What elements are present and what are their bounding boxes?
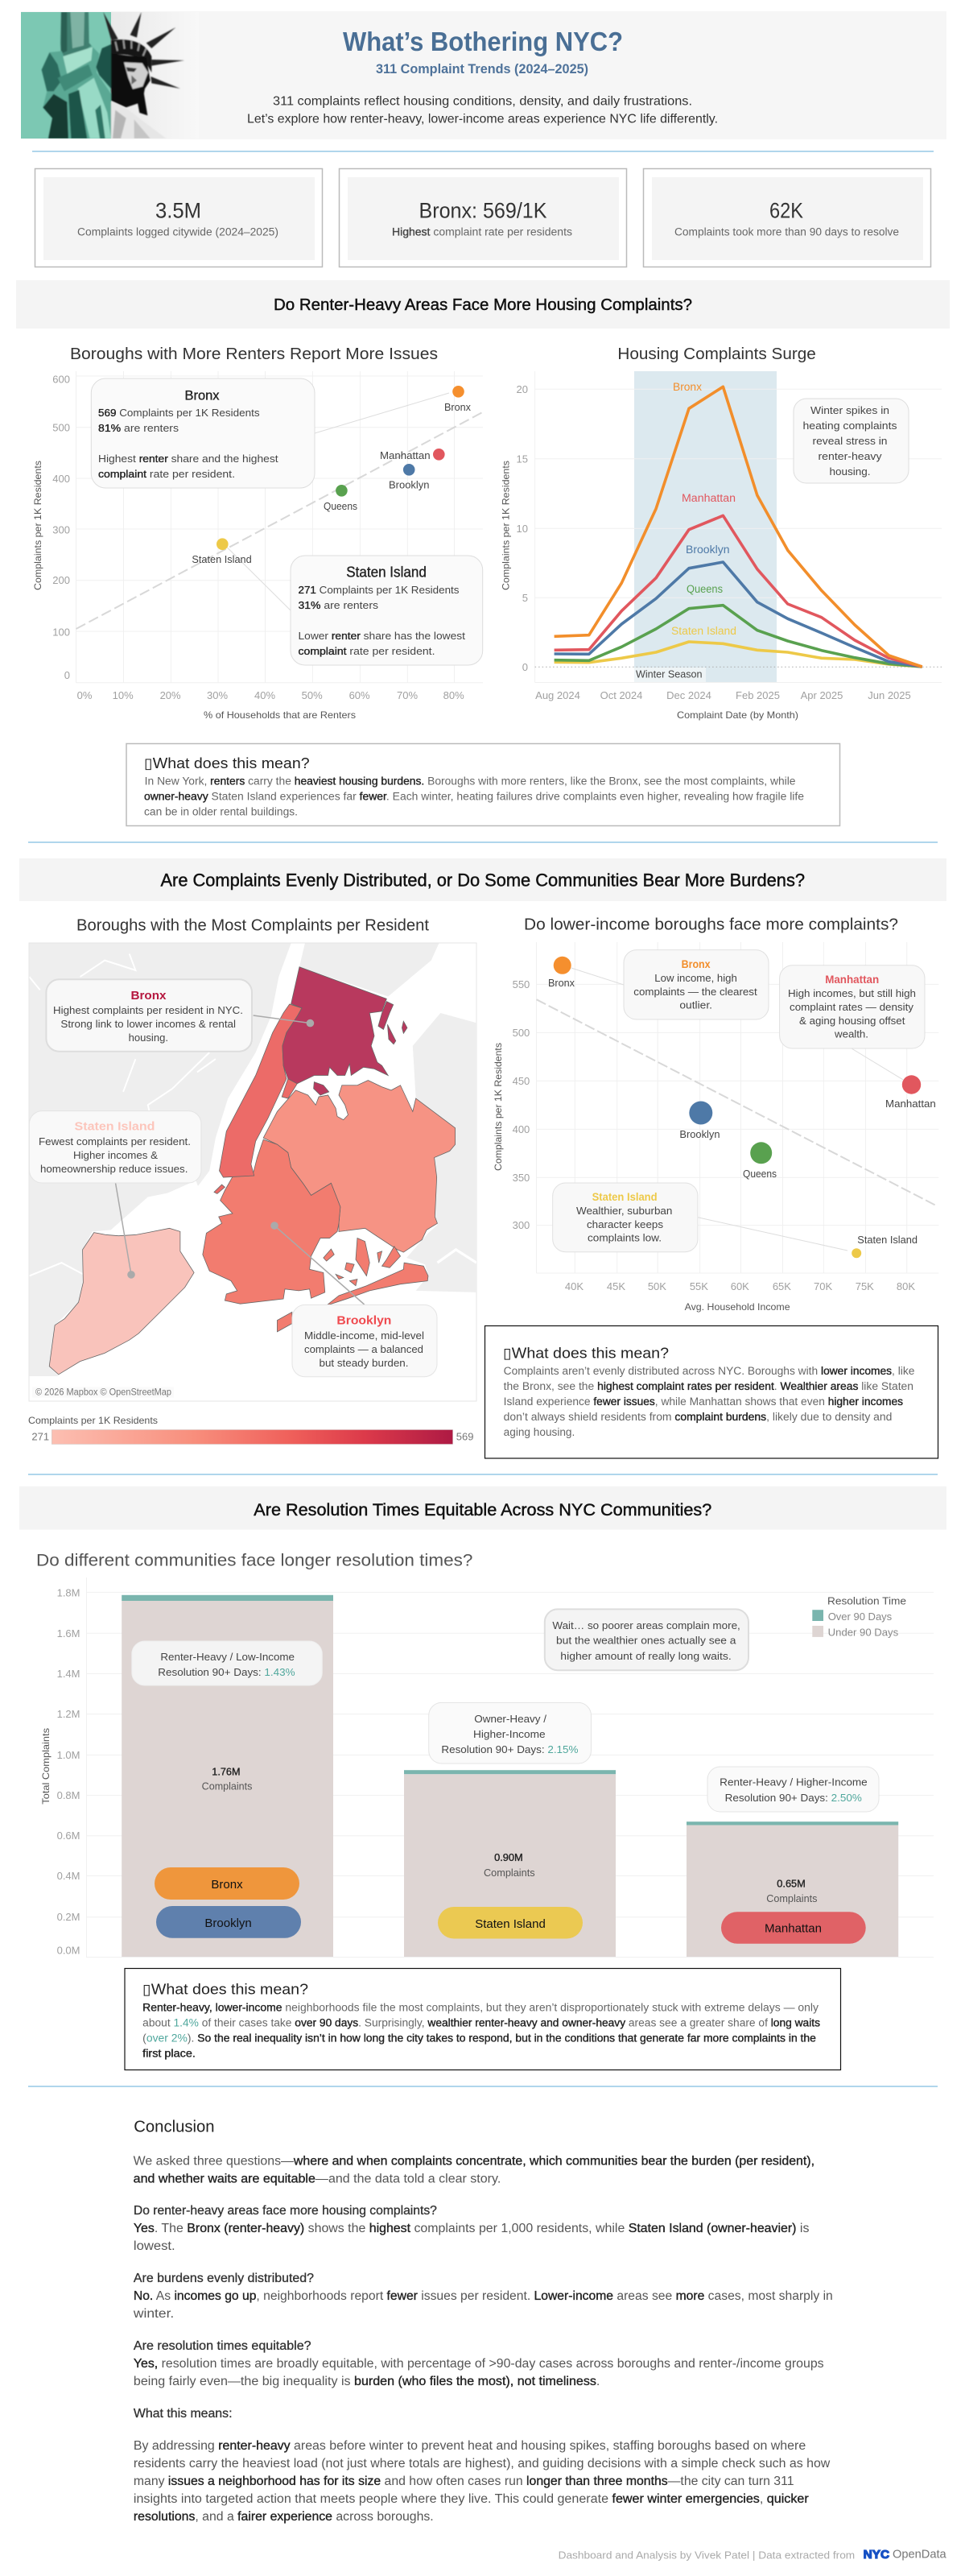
KPI card: total complaints: Complaints logged citywide (2024–2025): [77, 225, 278, 238]
subtitle: 311 Complaint Trends (2024–2025): [376, 61, 588, 76]
line chart: housing complaints by month: 20: [517, 383, 528, 395]
scatter chart: income vs complaints: Queens: [743, 1168, 777, 1180]
question two: winter.: [133, 2307, 174, 2321]
callout: winter spikes: reveal stress in: [813, 435, 887, 447]
insight box: resolution: ▯What does this mean?: [142, 1982, 308, 1998]
Manhattan borough: [219, 1004, 302, 1177]
icon: NYC OpenData logo: [864, 2548, 946, 2562]
scatter chart: income vs complaints: 550: [513, 978, 530, 990]
question two: Are burdens evenly distributed?: [134, 2272, 314, 2285]
legend: resolution time: Under 90 Days: [828, 1627, 899, 1639]
section heading: housing: Do Renter-Heavy Areas Face More Housing Complaints?: [274, 296, 692, 314]
callout: winter spikes: Winter spikes in: [810, 404, 889, 416]
icon: Statue of Liberty image: [21, 12, 199, 139]
scatter chart: renters vs complaints: 0: [64, 669, 70, 681]
question two: No. As incomes go up, neighborhoods report fewer issues per resident. Lower-income areas see more cases, most sharply in: [134, 2289, 833, 2303]
KPI card: total complaints: 3.5M: [155, 198, 201, 222]
map legend: 569: [456, 1431, 474, 1443]
scatter chart: income vs complaints: Bronx: [548, 977, 575, 989]
question one: Yes. The Bronx (renter-heavy) shows the highest complaints per 1,000 residents, while Staten Island (owner-heavier) is: [134, 2222, 810, 2235]
callout: winter spikes: housing.: [829, 465, 871, 478]
stacked bar chart: resolution times: 1.8M: [57, 1586, 80, 1599]
stacked bar chart: resolution times: 1.2M: [57, 1708, 80, 1720]
scatter chart: renters vs complaints: 60%: [349, 689, 370, 701]
insight box: renters: ▯What does this mean?: [144, 755, 310, 771]
scatter chart: renters vs complaints: Complaints per 1K Residents: [32, 461, 43, 590]
Rockaway and Jamaica Bay islands: [277, 1238, 428, 1332]
what this means: residents carry the heaviest load (not just where totals are highest), and guiding decisions with a simple check such as how: [134, 2457, 831, 2471]
legend: resolution time: Over 90 Days: [828, 1611, 893, 1623]
Bronx borough: [282, 967, 388, 1084]
scatter chart: renters vs complaints: 0%: [77, 689, 93, 701]
callout: Bronx income: [624, 950, 769, 1019]
insight box: distribution: Complaints aren’t evenly distributed across NYC. Boroughs with lower incomes, like: [504, 1365, 914, 1377]
bar: owner-heavy higher-income: Higher-Income: [473, 1728, 546, 1740]
callout: Brooklyn map: complaints — a balanced: [304, 1343, 423, 1355]
callout: Staten Island renters: complaint rate per resident.: [298, 645, 435, 657]
bar: owner-heavy higher-income: 0.90M: [494, 1852, 523, 1863]
scatter chart: renters vs complaints: 80%: [443, 689, 464, 701]
stacked bar chart: resolution times: [40, 1577, 934, 1958]
bar: renter-heavy low-income: 1.76M: [212, 1767, 240, 1778]
question three: [134, 2339, 824, 2388]
callout: Bronx income: Bronx: [682, 958, 711, 970]
scatter chart: income vs complaints: 45K: [607, 1280, 625, 1292]
bar: renter-heavy higher-income: Renter-Heavy / Higher-Income: [720, 1776, 868, 1788]
intro text: [247, 95, 718, 126]
line chart: housing complaints by month: 10: [517, 523, 528, 535]
what this means: insights into targeted action that meets people where they live. This could generate fewer winter emergencies , quicker: [134, 2492, 809, 2506]
scatter chart: renters vs complaints: Manhattan: [380, 449, 431, 461]
conclusion intro: [134, 2154, 814, 2186]
bar: owner-heavy higher-income: Staten Island: [475, 1917, 546, 1931]
KPI card: Bronx rate: Highest complaint rate per residents: [392, 225, 572, 238]
bar: renter-heavy low-income: Brooklyn: [204, 1916, 252, 1930]
insight box: resolution: (over 2%). So the real inequality isn’t in how long the city takes to respond, but in the conditions that generate far more complaints in the: [142, 2032, 816, 2045]
insight box: resolution: Renter-heavy, lower-income neighborhoods file the most complaints, but they aren’t disproportionately stuck with extreme delays — only: [142, 2002, 819, 2014]
scatter chart: renters vs complaints: 30%: [207, 689, 228, 701]
callout: Manhattan income: wealth.: [834, 1028, 868, 1040]
callout: long waits: higher amount of really long waits.: [560, 1650, 732, 1662]
scatter chart: income vs complaints: 55K: [690, 1280, 708, 1292]
bar: renter-heavy low-income: [122, 1595, 333, 1957]
callout: Bronx renters: 81% are renters: [98, 422, 179, 434]
scatter chart: income vs complaints: 75K: [856, 1280, 874, 1292]
scatter chart: income vs complaints: 60K: [731, 1280, 749, 1292]
scatter chart: renters vs complaints: 300: [52, 523, 70, 536]
callout: Bronx income: complaints — the clearest: [633, 986, 757, 998]
chart title: resolution: Do different communities face longer resolution times?: [36, 1551, 472, 1570]
line chart: housing complaints by month: Complaint Date (by Month): [677, 709, 798, 721]
callout: Bronx renters: [91, 378, 315, 488]
legend: resolution time: [812, 1594, 906, 1639]
bar: owner-heavy higher-income: Resolution 90+ Days: 2.15%: [441, 1743, 579, 1755]
bar: renter-heavy higher-income: Complaints: [766, 1893, 817, 1904]
bar: renter-heavy low-income: Complaints: [202, 1781, 252, 1792]
callout: Staten Island map: Higher incomes &: [73, 1149, 158, 1161]
legend: resolution time: Resolution Time: [827, 1594, 906, 1606]
bar: owner-heavy higher-income: Owner-Heavy /: [474, 1713, 546, 1725]
insight box: distribution: ▯What does this mean?: [503, 1345, 669, 1361]
callout: winter spikes: heating complaints: [803, 420, 897, 432]
callout: Staten Island income: Staten Island: [592, 1191, 658, 1203]
scatter chart: income vs complaints: 80K: [897, 1280, 915, 1292]
callout: Staten Island income: Wealthier, suburban: [576, 1205, 672, 1217]
section heading: distribution: Are Complaints Evenly Distributed, or Do Some Communities Bear More Burdens?: [161, 870, 805, 891]
KPI card: long waits: [644, 169, 930, 267]
callout: long waits: Wait… so poorer areas complain more,: [552, 1619, 740, 1631]
scatter chart: income vs complaints: 65K: [773, 1280, 791, 1292]
callout: long waits: but the wealthier ones actually see a: [556, 1635, 736, 1647]
footer credit: [559, 2548, 946, 2562]
map legend: Complaints per 1K Residents: [28, 1415, 158, 1426]
scatter chart: income vs complaints: 300: [513, 1219, 530, 1231]
conclusion intro: We asked three questions— where and when complaints concentrate, which communities bear the burden (per resident),: [134, 2154, 814, 2168]
line chart: housing complaints by month: Brooklyn: [686, 544, 729, 556]
scatter chart: renters vs complaints: 200: [52, 574, 70, 586]
bar: owner-heavy higher-income: Complaints: [484, 1867, 535, 1879]
icon: NYC OpenData logo: OpenData: [893, 2548, 946, 2562]
question one: [134, 2204, 810, 2253]
bar: renter-heavy higher-income: 0.65M: [777, 1879, 806, 1890]
callout: Bronx renters: Highest renter share and the highest: [98, 453, 278, 465]
callout: long waits: [545, 1609, 748, 1670]
line chart: housing complaints by month: Aug 2024: [535, 689, 580, 701]
callout: Staten Island income: [553, 1183, 698, 1252]
footer credit: Dashboard and Analysis by Vivek Patel | Data extracted from: [559, 2549, 855, 2561]
scatter chart: renters vs complaints: 20%: [160, 689, 181, 701]
map: complaints per resident by borough: [29, 943, 476, 1401]
bar: renter-heavy low-income: Resolution 90+ Days: 1.43%: [158, 1666, 295, 1678]
intro text: 311 complaints reflect housing conditions, density, and daily frustrations.: [273, 95, 692, 108]
insight box: resolution: about 1.4% of their cases take over 90 days. Surprisingly, wealthier renter-heavy and owner-heavy areas see a greater share of long waits: [142, 2017, 820, 2029]
Queens borough: [263, 1081, 456, 1252]
scatter chart: renters vs complaints: % of Households that are Renters: [204, 709, 356, 721]
scatter chart: income vs complaints: 500: [513, 1027, 530, 1039]
Staten Island borough: [49, 1228, 194, 1375]
map legend: 271: [31, 1431, 49, 1443]
conclusion heading: Conclusion: [134, 2118, 214, 2136]
scatter chart: renters vs complaints: 500: [52, 422, 70, 433]
stacked bar chart: resolution times: 1.0M: [57, 1749, 80, 1761]
chart title: renters scatter: Boroughs with More Renters Report More Issues: [70, 345, 438, 363]
insight box: renters: owner-heavy Staten Island experiences far fewer. Each winter, heating failures drive complaints even higher, revealing how fragile life: [144, 791, 804, 803]
callout: Brooklyn map: Brooklyn: [336, 1314, 391, 1327]
scatter chart: renters vs complaints: 70%: [397, 689, 418, 701]
callout: Bronx income: Low income, high: [654, 972, 737, 984]
title: What’s Bothering NYC?: [343, 27, 623, 56]
callout: Bronx income: outlier.: [679, 999, 712, 1011]
callout: Manhattan income: complaint rates — density: [790, 1001, 913, 1013]
callout: Bronx renters: complaint rate per resident.: [98, 468, 235, 480]
stacked bar chart: resolution times: Total Complaints: [40, 1728, 52, 1805]
KPI card: Bronx rate: [340, 169, 626, 267]
question three: being fairly even—the big inequality is burden (who files the most), not timeliness .: [134, 2375, 600, 2388]
insight box: distribution: [485, 1325, 938, 1458]
scatter chart: income vs complaints: 50K: [648, 1280, 666, 1292]
bar: renter-heavy higher-income: Resolution 90+ Days: 2.50%: [725, 1792, 862, 1804]
callout: Bronx renters: Bronx: [185, 388, 220, 403]
stacked bar chart: resolution times: 0.2M: [57, 1911, 80, 1923]
insight box: renters: [126, 744, 840, 826]
scatter chart: renters vs complaints: 400: [52, 473, 70, 485]
what this means: What this means:: [134, 2407, 232, 2421]
line chart: housing complaints by month: 0: [522, 661, 528, 673]
stacked bar chart: resolution times: 1.6M: [57, 1627, 80, 1639]
scatter chart: income vs complaints: 70K: [814, 1280, 832, 1292]
callout: winter spikes: [794, 399, 909, 483]
callout: Staten Island renters: Staten Island: [346, 564, 427, 581]
callout: Staten Island map: Fewest complaints per resident.: [39, 1135, 191, 1147]
question three: Yes, resolution times are broadly equitable, with percentage of >90-day cases across boroughs and renter-/income groups: [134, 2357, 824, 2371]
section heading: housing: [16, 280, 950, 329]
section heading: distribution: [19, 858, 946, 901]
line chart: housing complaints by month: Oct 2024: [600, 689, 642, 701]
insight box: distribution: the Bronx, see the highest complaint rates per resident . Wealthier areas like Staten: [504, 1380, 913, 1392]
what this means: By addressing renter-heavy areas before winter to prevent heat and housing spikes, staffing boroughs based on where: [134, 2439, 806, 2453]
icon: NYC OpenData logo: NYC: [864, 2548, 889, 2562]
callout: Staten Island map: [29, 1111, 201, 1183]
scatter chart: income vs complaints: 350: [513, 1172, 530, 1184]
scatter chart: renters vs complaints: 40%: [254, 689, 275, 701]
scatter chart: income vs complaints: [493, 942, 938, 1313]
callout: Bronx map: Strong link to lower incomes & rental: [60, 1018, 236, 1030]
line chart: housing complaints by month: Jun 2025: [868, 689, 911, 701]
scatter chart: renters vs complaints: 10%: [113, 689, 134, 701]
what this means: many issues a neighborhood has for its size and how often cases run longer than three months—the city can turn 311: [134, 2475, 794, 2488]
scatter chart: income vs complaints: Brooklyn: [679, 1128, 720, 1140]
intro text: Let’s explore how renter-heavy, lower-income areas experience NYC life differently.: [247, 113, 718, 126]
callout: Staten Island map: Staten Island: [74, 1120, 155, 1134]
callout: Staten Island renters: [291, 556, 483, 665]
scatter chart: renters vs complaints: 50%: [302, 689, 323, 701]
what this means: resolutions, and a fairer experience across boroughs.: [134, 2510, 434, 2524]
callout: Staten Island renters: 271 Complaints per 1K Residents: [298, 584, 460, 596]
insight box: distribution: don’t always shield residents from complaint burdens , likely due to density and: [504, 1411, 892, 1423]
section heading: resolution: Are Resolution Times Equitable Across NYC Communities?: [254, 1501, 711, 1520]
stacked bar chart: resolution times: 0.0M: [57, 1944, 80, 1957]
line chart: housing complaints by month: Bronx: [673, 381, 702, 393]
callout: Manhattan income: [780, 965, 925, 1048]
stacked bar chart: resolution times: 0.4M: [57, 1870, 80, 1882]
callout: Manhattan income: Manhattan: [825, 974, 879, 986]
scatter chart: income vs complaints: Manhattan: [885, 1098, 936, 1110]
KPI card: Bronx rate: Bronx: 569/1K: [419, 198, 547, 222]
stacked bar chart: resolution times: 0.8M: [57, 1789, 80, 1801]
insight box: resolution: first place.: [142, 2048, 196, 2060]
bar: renter-heavy low-income: Renter-Heavy / Low-Income: [160, 1651, 295, 1663]
line chart: housing complaints by month: Queens: [687, 583, 723, 595]
line chart: housing complaints by month: Complaints per 1K Residents: [501, 461, 512, 590]
scatter chart: income vs complaints: 40K: [565, 1280, 584, 1292]
KPI card: long waits: 62K: [769, 198, 803, 222]
scatter chart: income vs complaints: 450: [513, 1075, 530, 1087]
scatter chart: renters vs complaints: 600: [52, 374, 70, 385]
callout: Bronx map: [46, 979, 252, 1052]
KPI card: total complaints: [35, 169, 322, 267]
callout: Bronx map: Highest complaints per resident in NYC.: [53, 1004, 243, 1016]
callout: winter spikes: renter-heavy: [818, 450, 882, 462]
callout: Manhattan income: High incomes, but still high: [788, 987, 916, 999]
map: complaints per resident by borough: © 2026 Mapbox © OpenStreetMap: [35, 1388, 171, 1398]
callout: Brooklyn map: [292, 1305, 437, 1377]
what this means: [134, 2407, 831, 2524]
scatter chart: renters vs complaints: Staten Island: [192, 553, 252, 565]
chart title: housing surge: Housing Complaints Surge: [617, 345, 816, 363]
KPI card: long waits: Complaints took more than 90 days to resolve: [674, 225, 899, 238]
bar: renter-heavy higher-income: [687, 1767, 898, 1957]
insight box: distribution: aging housing.: [504, 1426, 575, 1438]
callout: Staten Island renters: Lower renter share has the lowest: [298, 630, 465, 642]
scatter chart: income vs complaints: Complaints per 1K Residents: [493, 1043, 504, 1171]
insight box: renters: can be in older rental buildings.: [144, 806, 298, 818]
chart title: map: Boroughs with the Most Complaints per Resident: [76, 917, 429, 935]
callout: Bronx map: Bronx: [130, 989, 167, 1003]
Brooklyn borough: [203, 1139, 340, 1304]
scatter chart: renters vs complaints: Queens: [324, 500, 357, 512]
bar: renter-heavy higher-income: Manhattan: [765, 1921, 822, 1936]
bar: renter-heavy low-income: Bronx: [211, 1878, 243, 1892]
insight box: resolution: [125, 1968, 840, 2069]
callout: Bronx map: housing.: [129, 1032, 168, 1044]
conclusion: [133, 2118, 833, 2524]
line chart: housing complaints by month: Apr 2025: [801, 689, 843, 701]
line chart: housing complaints by month: 15: [517, 453, 528, 465]
callout: Brooklyn map: but steady burden.: [319, 1357, 409, 1369]
section heading: resolution: [19, 1486, 946, 1530]
callout: Manhattan income: & aging housing offset: [799, 1015, 905, 1027]
line chart: housing complaints by month: 5: [522, 592, 528, 604]
scatter chart: renters vs complaints: Bronx: [444, 401, 471, 413]
insight box: distribution: Island experience fewer issues, while Manhattan shows that even higher incomes: [504, 1396, 903, 1408]
stacked bar chart: resolution times: 1.4M: [57, 1668, 80, 1680]
bar: owner-heavy higher-income: [404, 1702, 616, 1957]
map legend: [28, 1415, 474, 1445]
question two: [133, 2272, 833, 2321]
conclusion intro: and whether waits are equitable —and the data told a clear story.: [134, 2173, 501, 2186]
line chart: housing complaints by month: Manhattan: [682, 492, 736, 504]
stacked bar chart: resolution times: 0.6M: [57, 1830, 80, 1842]
callout: Staten Island map: homeownership reduce issues.: [40, 1163, 188, 1175]
line chart: housing complaints by month: Feb 2025: [736, 689, 780, 701]
callout: Staten Island income: character keeps: [587, 1218, 664, 1230]
callout: Bronx renters: 569 Complaints per 1K Residents: [98, 407, 260, 419]
callout: Staten Island renters: 31% are renters: [298, 599, 379, 611]
scatter chart: renters vs complaints: Brooklyn: [389, 479, 430, 491]
line chart: housing complaints by month: Staten Island: [671, 625, 736, 637]
question one: lowest.: [134, 2239, 175, 2253]
scatter chart: renters vs complaints: 100: [52, 626, 70, 638]
callout: Brooklyn map: Middle-income, mid-level: [304, 1329, 424, 1342]
scatter chart: renters vs complaints: [32, 371, 483, 721]
scatter chart: income vs complaints: 400: [513, 1123, 530, 1135]
question one: Do renter-heavy areas face more housing complaints?: [134, 2204, 437, 2218]
line chart: housing complaints by month: [501, 371, 942, 721]
scatter chart: income vs complaints: Staten Island: [857, 1234, 918, 1246]
insight box: renters: In New York, renters carry the heaviest housing burdens. Boroughs with more renters, like the Bronx, see the most complaints, while: [145, 775, 795, 788]
line chart: housing complaints by month: Winter Season: [636, 668, 702, 680]
chart title: income scatter: Do lower-income boroughs face more complaints?: [524, 916, 898, 934]
header banner: [21, 11, 946, 139]
scatter chart: income vs complaints: Avg. Household Income: [685, 1301, 790, 1313]
callout: Staten Island income: complaints low.: [588, 1232, 662, 1244]
question three: Are resolution times equitable?: [134, 2339, 311, 2353]
line chart: housing complaints by month: Dec 2024: [666, 689, 711, 701]
